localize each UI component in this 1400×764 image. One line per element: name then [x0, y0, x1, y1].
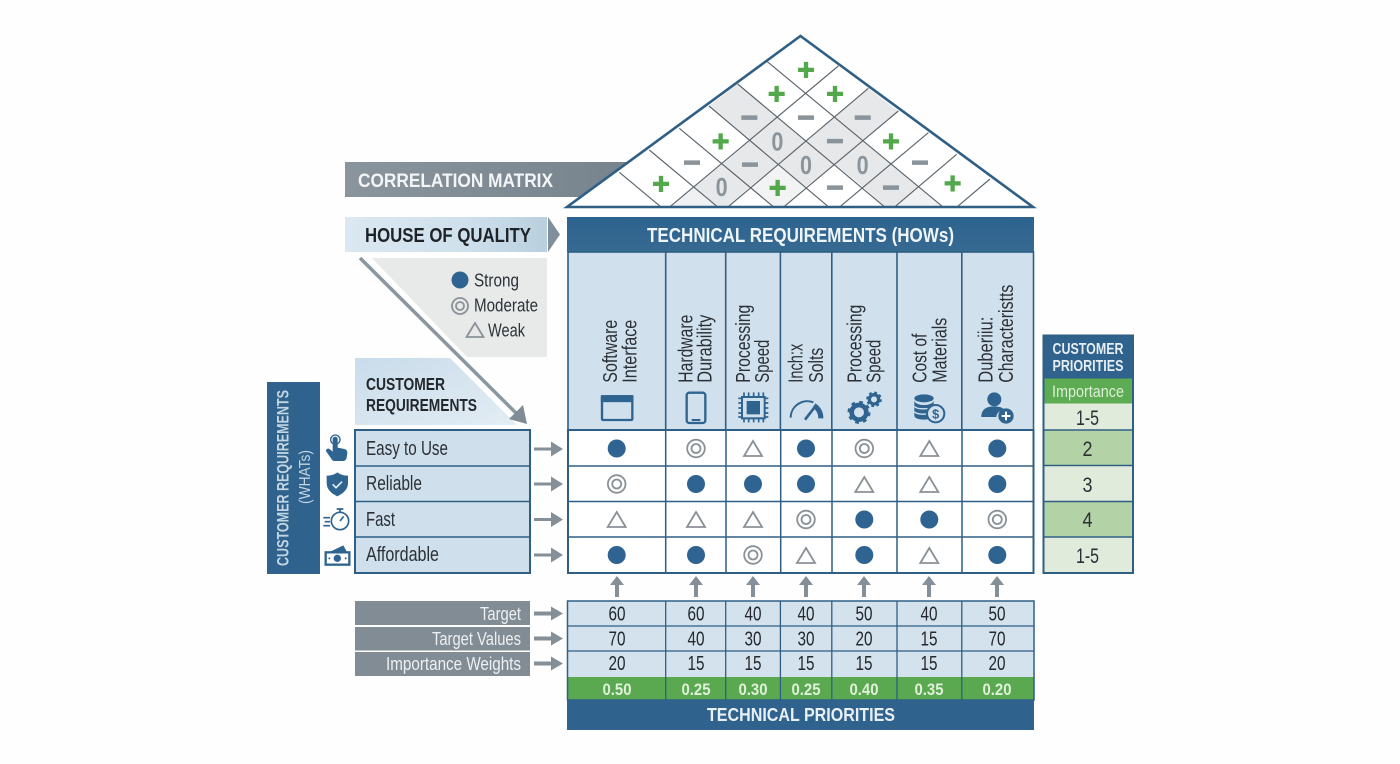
- technical requirement columns: Speed: [864, 340, 886, 383]
- icon: money: [326, 545, 349, 565]
- customer requirements vertical label: (WHATs): [297, 450, 314, 504]
- technical priorities footer: [567, 700, 1034, 730]
- target values table: 70: [988, 628, 1006, 650]
- technical requirements header: [567, 217, 1034, 252]
- target values table: 20: [856, 628, 872, 650]
- customer priorities column: [1044, 336, 1133, 573]
- correlation matrix roof: −: [741, 149, 759, 182]
- technical requirement columns: [568, 252, 1034, 430]
- technical requirement columns: Speed: [752, 340, 774, 383]
- correlation matrix roof: +: [712, 125, 729, 158]
- customer requirement icons: [323, 435, 349, 565]
- correlation matrix label: CORRELATION MATRIX: [358, 170, 553, 192]
- correlation matrix roof: +: [768, 78, 785, 111]
- correlation matrix roof: 0: [771, 127, 783, 157]
- correlation matrix roof: −: [826, 172, 844, 205]
- icon: stopwatch: [323, 509, 349, 530]
- technical requirement columns: Processing: [733, 305, 755, 383]
- correlation matrix roof: −: [683, 147, 701, 180]
- target values table: 30: [744, 628, 762, 650]
- correlation matrix roof: +: [826, 78, 844, 111]
- technical requirement columns: Software: [600, 320, 622, 383]
- target values table: 50: [988, 604, 1006, 626]
- target values table: 60: [608, 604, 626, 626]
- target values table: 0.50: [602, 681, 632, 699]
- correlation matrix roof: −: [882, 172, 900, 205]
- technical requirement columns: Cost of: [910, 333, 932, 383]
- correlation matrix roof: +: [769, 172, 786, 205]
- icon: person with plus: [981, 392, 1014, 424]
- target values table: 30: [798, 628, 814, 650]
- target values table: 70: [608, 628, 626, 650]
- customer priorities column: Importance: [1052, 382, 1124, 401]
- customer priorities column: 1-5: [1076, 545, 1099, 568]
- technical requirement columns: Processing: [845, 305, 867, 383]
- target values table: 0.30: [738, 681, 768, 699]
- customer priorities column: 1-5: [1076, 407, 1099, 430]
- customer requirements table: Fast: [366, 509, 395, 531]
- correlation matrix roof: −: [826, 125, 844, 158]
- correlation matrix roof: 0: [716, 172, 728, 202]
- correlation matrix roof: +: [797, 54, 815, 87]
- target values table: 0.25: [792, 681, 820, 699]
- house of quality banner: [345, 217, 560, 252]
- target values table: 40: [744, 604, 762, 626]
- correlation matrix roof: 0: [857, 150, 869, 180]
- customer requirements heading: REQUIREMENTS: [366, 395, 477, 415]
- target values table: 0.20: [982, 681, 1012, 699]
- target values table: 0.40: [850, 681, 878, 699]
- technical requirement columns: Durability: [695, 315, 717, 383]
- technical requirements header: TECHNICAL REQUIREMENTS (HOWs): [647, 225, 954, 247]
- target values table: 15: [920, 653, 938, 675]
- icon: smartphone: [687, 393, 705, 423]
- technical requirement columns: Inch:x: [786, 344, 808, 383]
- customer requirements table: Easy to Use: [366, 438, 448, 460]
- target values table: 15: [920, 628, 938, 650]
- target values table: [567, 601, 1034, 700]
- customer requirements table: Reliable: [366, 473, 422, 495]
- technical requirement columns: Hardware: [676, 315, 698, 383]
- technical priorities footer: TECHNICAL PRIORITIES: [707, 704, 895, 725]
- technical requirement columns: Materials: [930, 318, 952, 383]
- correlation matrix roof: +: [944, 167, 961, 200]
- correlation matrix roof: −: [797, 102, 815, 135]
- customer requirements heading: CUSTOMER: [366, 374, 445, 394]
- icon: processor chip: [738, 392, 768, 422]
- correlation matrix roof: +: [882, 125, 900, 158]
- legend: Strong: [474, 270, 519, 290]
- relationship matrix: [568, 430, 1034, 573]
- legend: [372, 258, 547, 357]
- target row labels: Target: [480, 604, 521, 624]
- customer requirements vertical label: [267, 382, 320, 574]
- target values table: 20: [988, 653, 1006, 675]
- target values table: 40: [688, 628, 704, 650]
- customer requirements vertical label: CUSTOMER REQUIREMENTS: [274, 390, 292, 566]
- target values table: 0.25: [682, 681, 710, 699]
- correlation matrix roof: −: [911, 147, 929, 180]
- customer priorities column: 2: [1082, 438, 1092, 461]
- correlation matrix roof: [567, 36, 1033, 207]
- column up arrows: [610, 576, 1004, 597]
- row arrows: [534, 442, 563, 562]
- icon: browser window: [602, 396, 632, 420]
- target values table: 15: [798, 653, 814, 675]
- technical requirement columns: Interface: [620, 320, 642, 383]
- target values table: 15: [744, 653, 762, 675]
- icon: speed gauge: [791, 401, 823, 420]
- customer requirements heading: [355, 358, 517, 425]
- correlation matrix label: [345, 162, 635, 197]
- customer priorities column: PRIORITIES: [1052, 358, 1124, 375]
- correlation matrix roof: −: [854, 102, 871, 135]
- target values table: 0.35: [914, 681, 944, 699]
- correlation matrix roof: 0: [800, 150, 812, 180]
- icon: gears: [849, 393, 881, 422]
- technical requirement columns: Solts: [806, 348, 828, 383]
- icon: coins and dollar: $: [932, 407, 939, 421]
- target row arrows: [534, 606, 563, 670]
- target row labels: [355, 601, 530, 676]
- target values table: 15: [856, 653, 872, 675]
- legend: Moderate: [474, 294, 538, 316]
- customer priorities column: 4: [1082, 509, 1093, 532]
- target values table: 20: [608, 653, 626, 675]
- icon: touch hand: [326, 435, 347, 461]
- icon: shield check: [327, 472, 348, 496]
- customer requirements table: Affordable: [366, 544, 439, 566]
- diagonal arrow: [360, 258, 527, 424]
- technical requirement columns: Duberiiu:: [976, 317, 998, 383]
- target row labels: Importance Weights: [386, 654, 521, 674]
- target values table: 50: [856, 604, 872, 626]
- house of quality banner: HOUSE OF QUALITY: [365, 225, 532, 247]
- icon: coins and dollar: [914, 394, 944, 422]
- correlation matrix roof: +: [652, 168, 670, 201]
- legend: Weak: [488, 320, 526, 340]
- target row labels: Target Values: [432, 629, 521, 649]
- customer priorities column: CUSTOMER: [1052, 341, 1124, 358]
- customer priorities column: 3: [1082, 474, 1092, 497]
- target values table: 40: [798, 604, 814, 626]
- target values table: 40: [920, 604, 938, 626]
- target values table: 60: [688, 604, 704, 626]
- customer requirements table: [355, 430, 530, 573]
- correlation matrix roof: −: [741, 102, 758, 135]
- target values table: 15: [688, 653, 704, 675]
- technical requirement columns: Characteristts: [996, 285, 1018, 383]
